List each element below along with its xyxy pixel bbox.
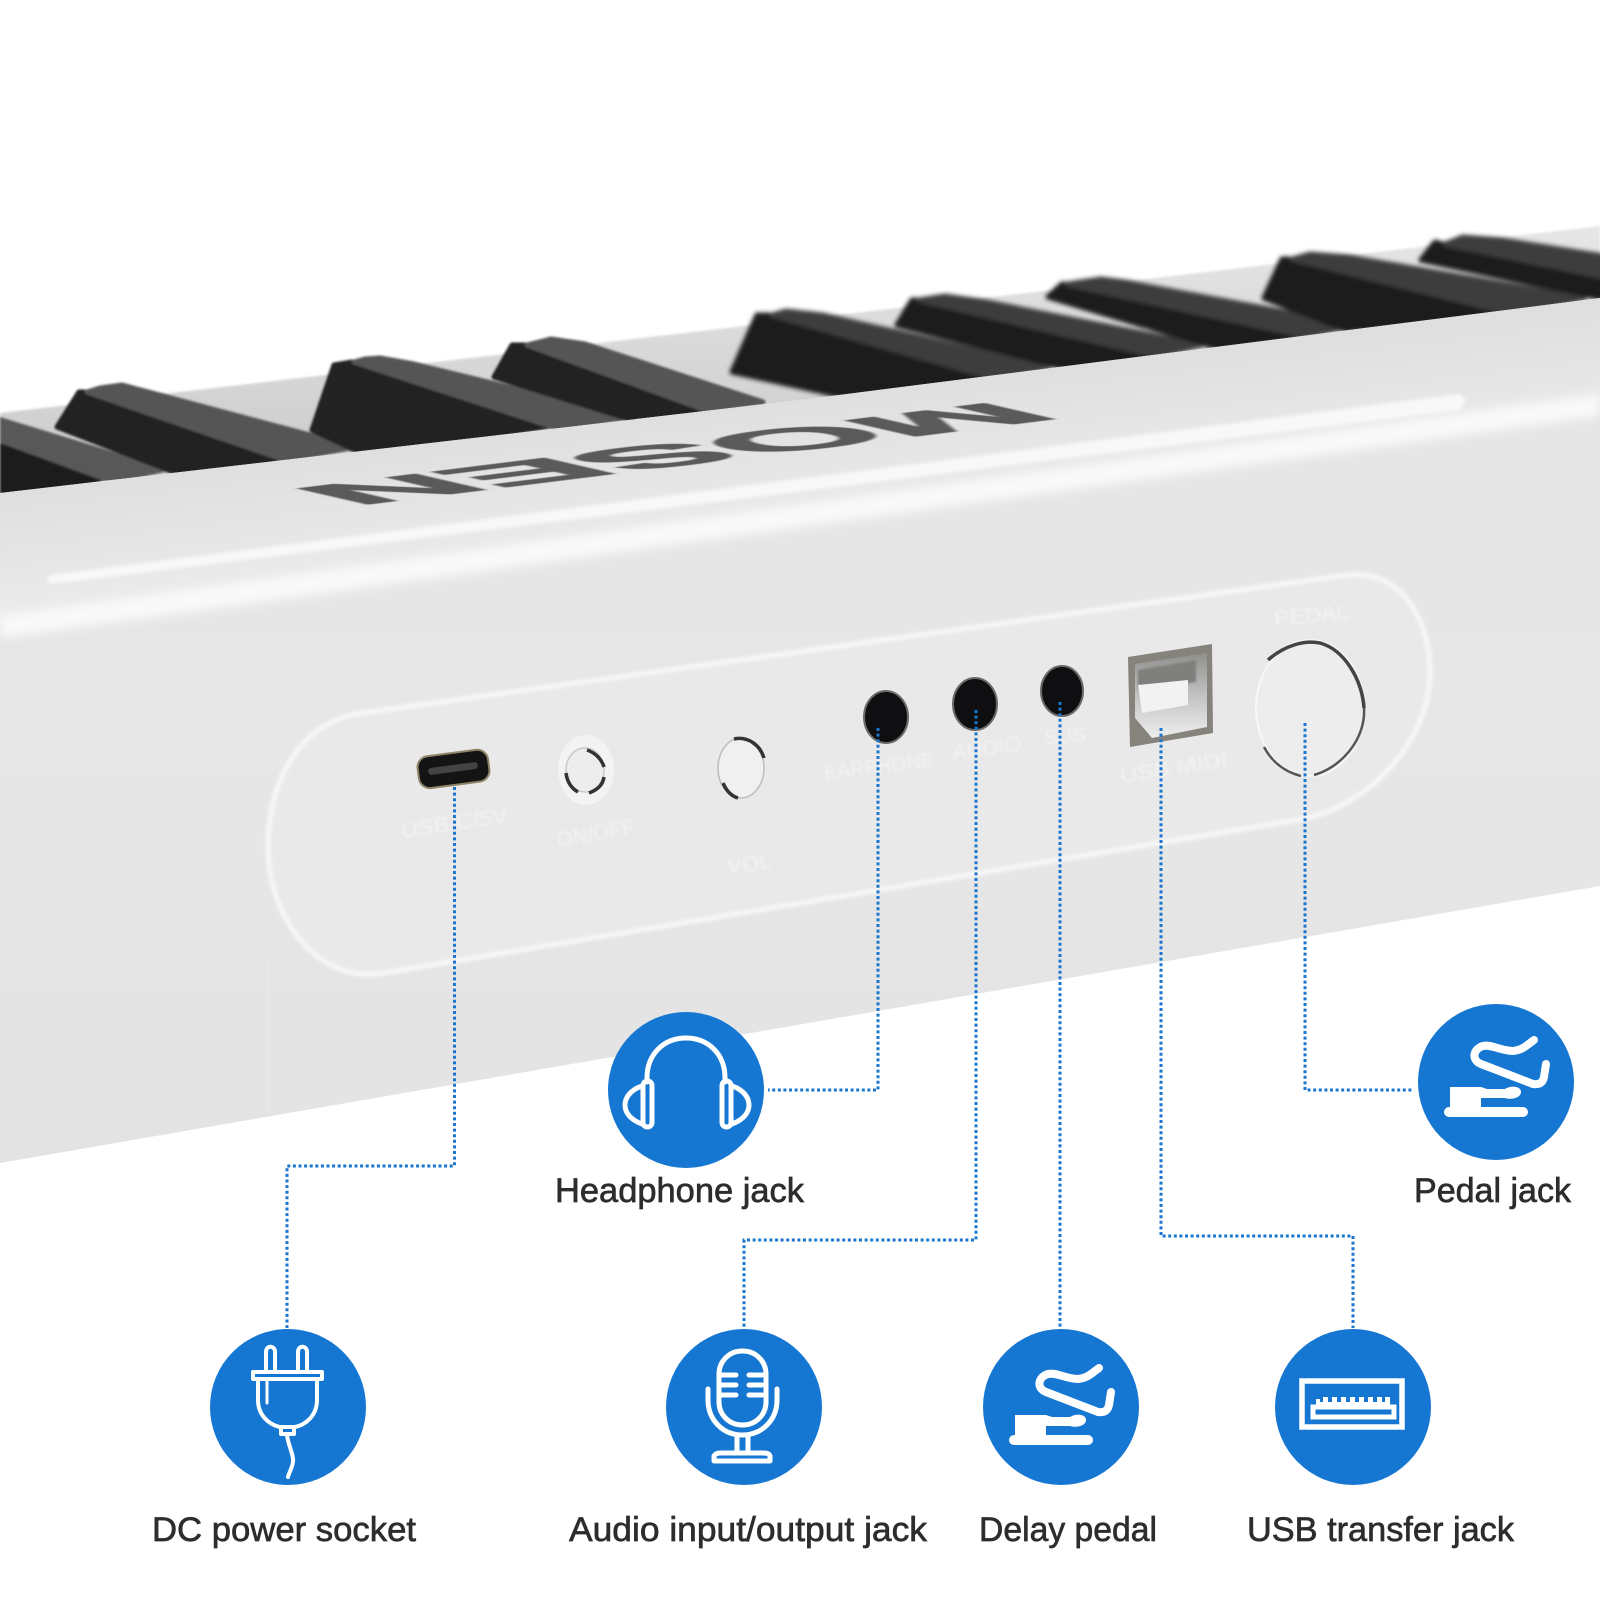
embossed port labels: VOL — [725, 850, 773, 879]
callout: pedal jack — [1414, 1004, 1574, 1210]
callout: USB transfer jack — [1247, 1329, 1515, 1549]
leader line: USB — [1161, 728, 1353, 1328]
embossed port labels: USB MIDI — [1118, 748, 1229, 788]
port: USB-C — [416, 748, 491, 789]
port panel — [268, 574, 1430, 974]
leader line: headphone — [768, 728, 878, 1090]
callout: DC power socket — [152, 1329, 417, 1549]
icon: pedal — [983, 1329, 1139, 1485]
port: earphone jack — [864, 691, 908, 743]
leader line: audio — [744, 710, 976, 1328]
port: sustain jack — [1041, 666, 1083, 716]
port: volume knob — [718, 738, 764, 798]
keyboard white key strip — [0, 226, 1600, 500]
icon: plug — [210, 1329, 366, 1485]
body upper face shading — [0, 298, 1600, 625]
port: audio jack — [953, 678, 997, 730]
black keys — [0, 237, 1600, 500]
embossed port labels: EARPHONE — [823, 749, 935, 785]
label: Audio input/output jack — [569, 1511, 928, 1549]
leader line: pedal — [1305, 723, 1413, 1090]
port: pedal socket — [1256, 640, 1364, 776]
label: Headphone jack — [555, 1172, 805, 1210]
icon: microphone — [666, 1329, 822, 1485]
embossed port labels: SUS — [1043, 723, 1087, 750]
callout: headphone jack — [555, 1012, 805, 1210]
embossed port labels: ON/OFF — [555, 816, 637, 852]
embossed port labels: AUDIO — [950, 732, 1023, 765]
embossed port labels: PEDAL — [1273, 600, 1350, 631]
keyboard body — [0, 298, 1600, 1163]
callout: audio input/output jack — [569, 1329, 928, 1549]
label: DC power socket — [152, 1511, 417, 1549]
icon: USB port — [1275, 1329, 1431, 1485]
leader line: delay pedal — [1058, 702, 1062, 1328]
label: USB transfer jack — [1247, 1511, 1515, 1549]
icon: pedal — [1418, 1004, 1574, 1160]
label: Delay pedal — [979, 1511, 1157, 1549]
port: power button — [558, 735, 614, 805]
icon: headphones — [608, 1012, 764, 1168]
logo: MOSEN: MOSEN — [266, 397, 1086, 511]
body highlights — [0, 394, 1600, 1110]
label: Pedal jack — [1414, 1172, 1572, 1210]
leader line: DC power — [287, 787, 454, 1328]
embossed port labels: USB C/5V — [399, 804, 510, 843]
callout: delay pedal — [979, 1329, 1157, 1549]
embossed port labels — [399, 600, 1350, 879]
port: USB-B MIDI — [1128, 644, 1213, 747]
